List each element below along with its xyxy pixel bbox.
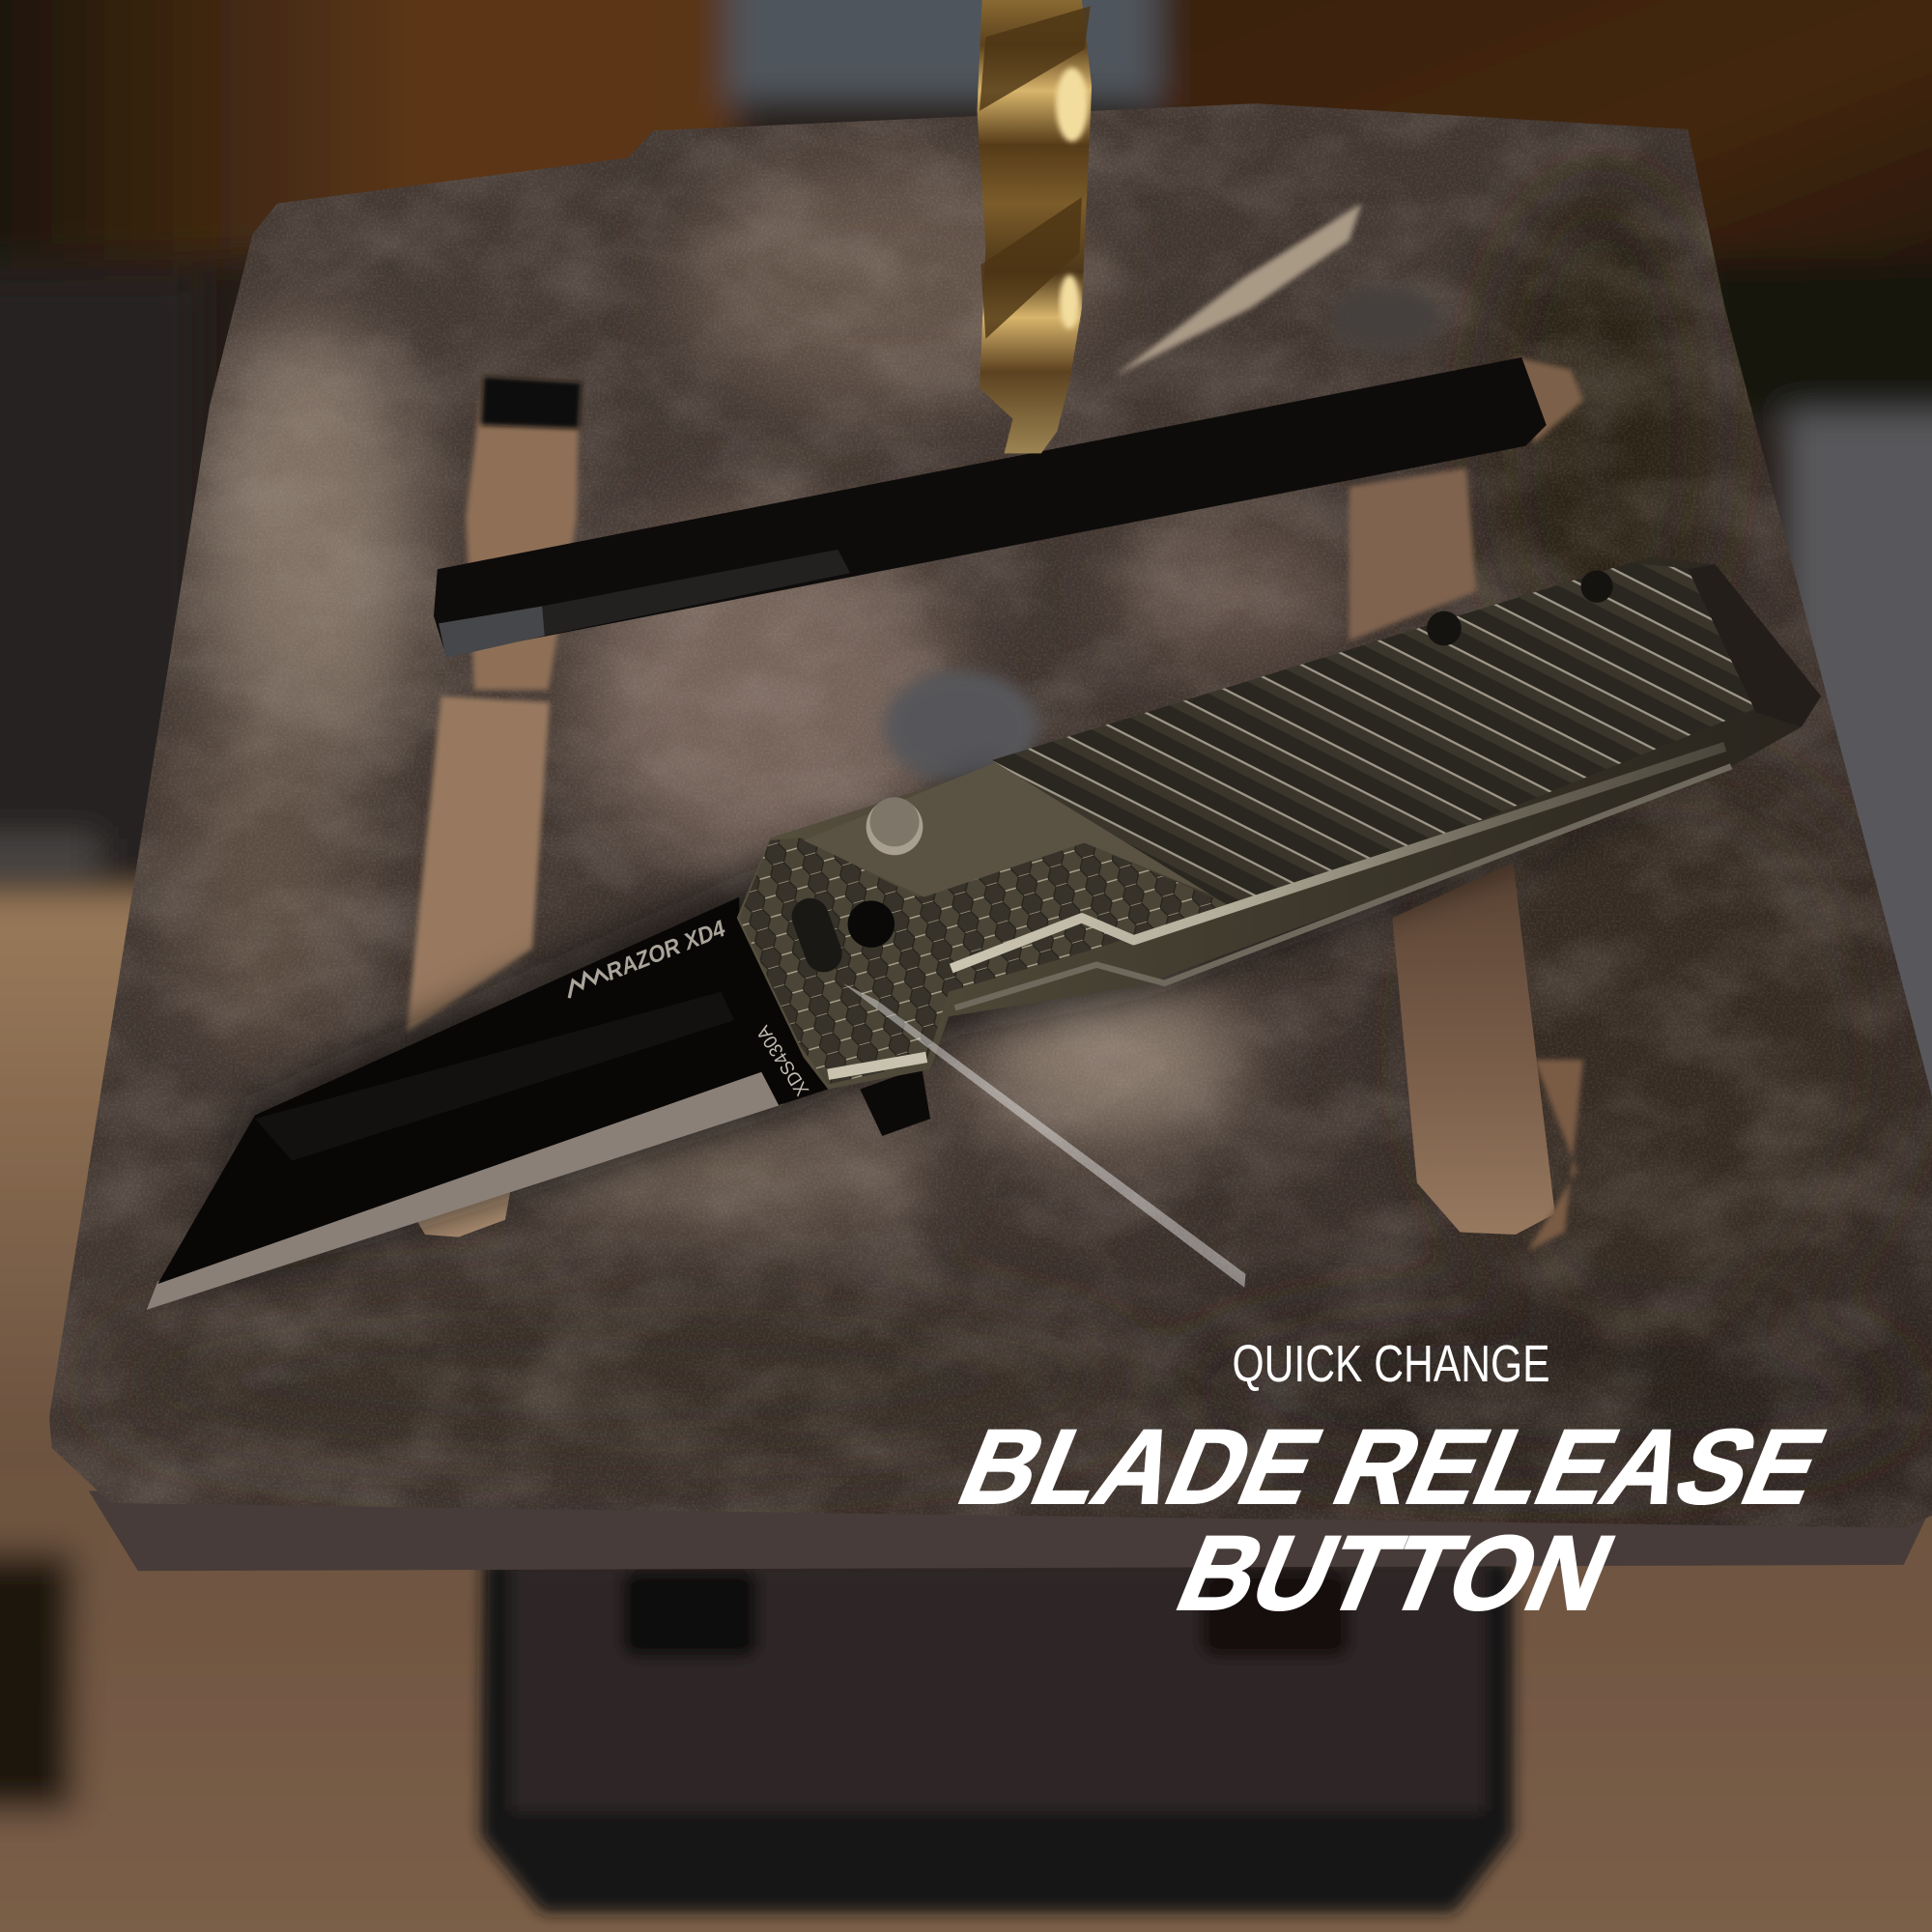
black clip under handle [860, 1067, 930, 1136]
title: blade release button [943, 1408, 1841, 1633]
blade logo: Razor XD4: RAZOR XD4 [603, 916, 729, 986]
black clamp bar [434, 357, 1547, 658]
title: blade release button: BLADE RELEASE [943, 1408, 1841, 1526]
drill bit [977, 0, 1092, 453]
pommel [1688, 564, 1821, 727]
ribbed handle scales [992, 563, 1756, 909]
handle screw one [1427, 611, 1462, 645]
title: blade release button: BUTTON [1161, 1515, 1631, 1633]
chrome handle edge [828, 747, 1731, 1074]
blade fuller [255, 992, 734, 1161]
panel: steel drill table [49, 103, 1932, 1528]
handle body [737, 557, 1821, 1090]
pivot screw [848, 900, 895, 948]
blade model number: XDS430A [753, 1021, 813, 1099]
knife [147, 557, 1821, 1310]
hex grip panel [739, 838, 1233, 1084]
knife shadow [185, 777, 1725, 1293]
callout pointer line [842, 983, 1246, 1288]
handle screw two [1580, 571, 1613, 603]
plate front edge [89, 1491, 1932, 1571]
pivot button [867, 797, 923, 855]
heading: quick change: QUICK CHANGE [1233, 1336, 1550, 1393]
blade [157, 897, 828, 1284]
blade release button slider [786, 893, 847, 978]
drill press base [480, 1559, 1513, 1913]
table slots and openings [407, 288, 1583, 1251]
blade bevel [147, 1069, 783, 1310]
blade logo: Razor XD4 [561, 916, 729, 1003]
smooth upper bolster [804, 761, 1233, 903]
